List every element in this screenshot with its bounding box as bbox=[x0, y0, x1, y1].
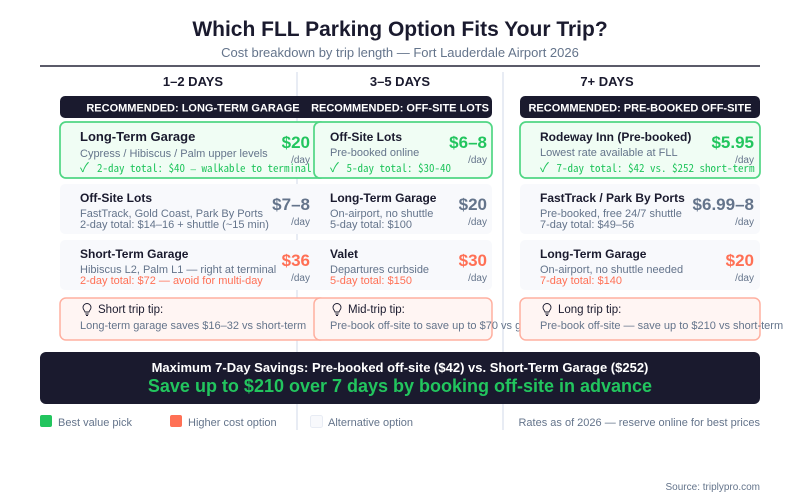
card: short-term garage: Hibiscus L2, Palm L1 — right at terminal bbox=[80, 264, 276, 276]
card: rodeway inn: 7-day total: $42 vs. $252 short-term bbox=[556, 160, 755, 176]
card: fasttrack / park by ports: 7-day total: $49–56 bbox=[540, 219, 634, 231]
card: long-term garage bbox=[314, 184, 492, 234]
card: rodeway inn: ✓ bbox=[540, 157, 549, 176]
card: long-term garage: /day bbox=[468, 217, 487, 228]
card: long-term garage: Long-Term Garage bbox=[80, 129, 195, 144]
legend bbox=[40, 415, 413, 429]
card: off-site lots: 2-day total: $14–16 + shuttle (~15 min) bbox=[80, 219, 269, 231]
card: off-site lots: $6–8 bbox=[449, 133, 487, 152]
card: fasttrack / park by ports: FastTrack / Park By Ports bbox=[540, 191, 685, 205]
banner: recommended off-site lots: RECOMMENDED: OFF-SITE LOTS bbox=[311, 102, 489, 114]
card: off-site lots: Off-Site Lots bbox=[330, 130, 402, 144]
legend: alternative option: Alternative option bbox=[328, 417, 413, 429]
card: long-term garage bbox=[60, 122, 326, 178]
card: fasttrack / park by ports bbox=[520, 184, 760, 234]
banner: recommended pre-booked off-site: RECOMMENDED: PRE-BOOKED OFF-SITE bbox=[528, 102, 752, 114]
banner: recommended long-term garage bbox=[60, 96, 326, 118]
callout: short trip tip bbox=[60, 298, 326, 340]
card: long-term garage: $20 bbox=[726, 251, 754, 270]
title: Which FLL Parking Option Fits Your Trip? bbox=[192, 18, 608, 41]
card: valet bbox=[314, 240, 492, 290]
card: off-site lots: /day bbox=[468, 155, 487, 166]
banner: recommended long-term garage: RECOMMENDED: LONG-TERM GARAGE bbox=[86, 102, 300, 114]
card: short-term garage: 2-day total: $72 — avoid for multi-day bbox=[80, 275, 263, 287]
panel: 3–5 days bbox=[310, 74, 549, 340]
card: long-term garage: ✓ bbox=[80, 157, 89, 176]
card: fasttrack / park by ports: Pre-booked, free 24/7 shuttle bbox=[540, 208, 682, 220]
card: off-site lots: 5-day total: $30-40 bbox=[346, 160, 451, 176]
card: rodeway inn: /day bbox=[735, 155, 754, 166]
card: long-term garage: Cypress / Hibiscus / Palm upper levels bbox=[80, 148, 268, 160]
legend: best value pick: Best value pick bbox=[58, 417, 132, 429]
card: long-term garage: 2-day total: $40 bbox=[97, 160, 190, 176]
callout: long trip tip: Pre-book off-site — save up to $210 vs short-term bbox=[540, 320, 783, 332]
card: short-term garage: $36 bbox=[282, 251, 310, 270]
banner: recommended off-site lots bbox=[310, 96, 492, 118]
card: long-term garage: Long-Term Garage bbox=[540, 247, 647, 261]
card: short-term garage: /day bbox=[291, 273, 310, 284]
card: off-site lots: /day bbox=[291, 217, 310, 228]
savings banner bbox=[40, 352, 760, 404]
card: long-term garage: On-airport, no shuttle needed bbox=[540, 264, 683, 276]
callout: mid-trip tip: Pre-book off-site to save up to $70 vs garage bbox=[330, 320, 549, 332]
card: valet: Departures curbside bbox=[330, 264, 429, 276]
callout: mid-trip tip bbox=[314, 298, 549, 340]
card: long-term garage: /day bbox=[735, 273, 754, 284]
card: valet: 5-day total: $150 bbox=[330, 275, 412, 287]
card: long-term garage: $20 bbox=[282, 133, 310, 152]
card: long-term garage: — walkable to terminal bbox=[190, 160, 312, 176]
card: long-term garage: /day bbox=[291, 155, 310, 166]
legend: higher cost option: Higher cost option bbox=[188, 417, 277, 429]
card: off-site lots: Off-Site Lots bbox=[80, 191, 152, 205]
banner: recommended pre-booked off-site bbox=[520, 96, 760, 118]
legend: best value pick bbox=[40, 415, 132, 429]
panel: 7+ days bbox=[520, 74, 783, 340]
card: long-term garage: 7-day total: $140 bbox=[540, 275, 622, 287]
subtitle: Cost breakdown by trip length — Fort Lauderdale Airport 2026 bbox=[221, 45, 579, 60]
card: long-term garage bbox=[520, 240, 760, 290]
card: long-term garage: 5-day total: $100 bbox=[330, 219, 412, 231]
card: off-site lots: Pre-booked online bbox=[330, 147, 419, 159]
card: rodeway inn: Rodeway Inn (Pre-booked) bbox=[540, 130, 691, 144]
card: rodeway inn: Lowest rate available at FLL bbox=[540, 147, 678, 159]
callout: long trip tip: Long trip tip: bbox=[558, 304, 621, 316]
callout: long trip tip bbox=[520, 298, 783, 340]
panel: 1–2 days bbox=[60, 74, 326, 340]
card: fasttrack / park by ports: /day bbox=[735, 217, 754, 228]
card: long-term garage: $20 bbox=[459, 195, 487, 214]
card: fasttrack / park by ports: $6.99–8 bbox=[693, 195, 754, 214]
callout: short trip tip: Short trip tip: bbox=[98, 304, 163, 316]
callout: mid-trip tip: Mid-trip tip: bbox=[348, 304, 405, 316]
card: long-term garage: On-airport, no shuttle bbox=[330, 208, 433, 220]
card: long-term garage: Long-Term Garage bbox=[330, 191, 437, 205]
savings banner: Maximum 7-Day Savings: Pre-booked off-site ($42) vs. Short-Term Garage ($252) bbox=[152, 360, 648, 375]
heading: 3–5 days: 3–5 DAYS bbox=[370, 74, 430, 89]
card: off-site lots: $7–8 bbox=[272, 195, 310, 214]
card: short-term garage: Short-Term Garage bbox=[80, 247, 189, 261]
card: off-site lots bbox=[60, 184, 326, 234]
card: short-term garage bbox=[60, 240, 326, 290]
card: off-site lots bbox=[314, 122, 492, 178]
card: valet: $30 bbox=[459, 251, 487, 270]
heading: 7+ days: 7+ DAYS bbox=[580, 74, 634, 89]
source: Source: triplypro.com bbox=[666, 482, 760, 493]
rates note: Rates as of 2026 — reserve online for best prices bbox=[518, 417, 760, 429]
card: rodeway inn: $5.95 bbox=[711, 133, 754, 152]
card: off-site lots: FastTrack, Gold Coast, Park By Ports bbox=[80, 208, 263, 220]
card: off-site lots: ✓ bbox=[330, 157, 339, 176]
callout: short trip tip: Long-term garage saves $16–32 vs short-term bbox=[80, 320, 306, 332]
savings banner: Save up to $210 over 7 days by booking off-site in advance bbox=[148, 376, 652, 396]
card: valet: Valet bbox=[330, 247, 358, 261]
card: valet: /day bbox=[468, 273, 487, 284]
heading: 1–2 days: 1–2 DAYS bbox=[163, 74, 223, 89]
card: rodeway inn bbox=[520, 122, 760, 178]
